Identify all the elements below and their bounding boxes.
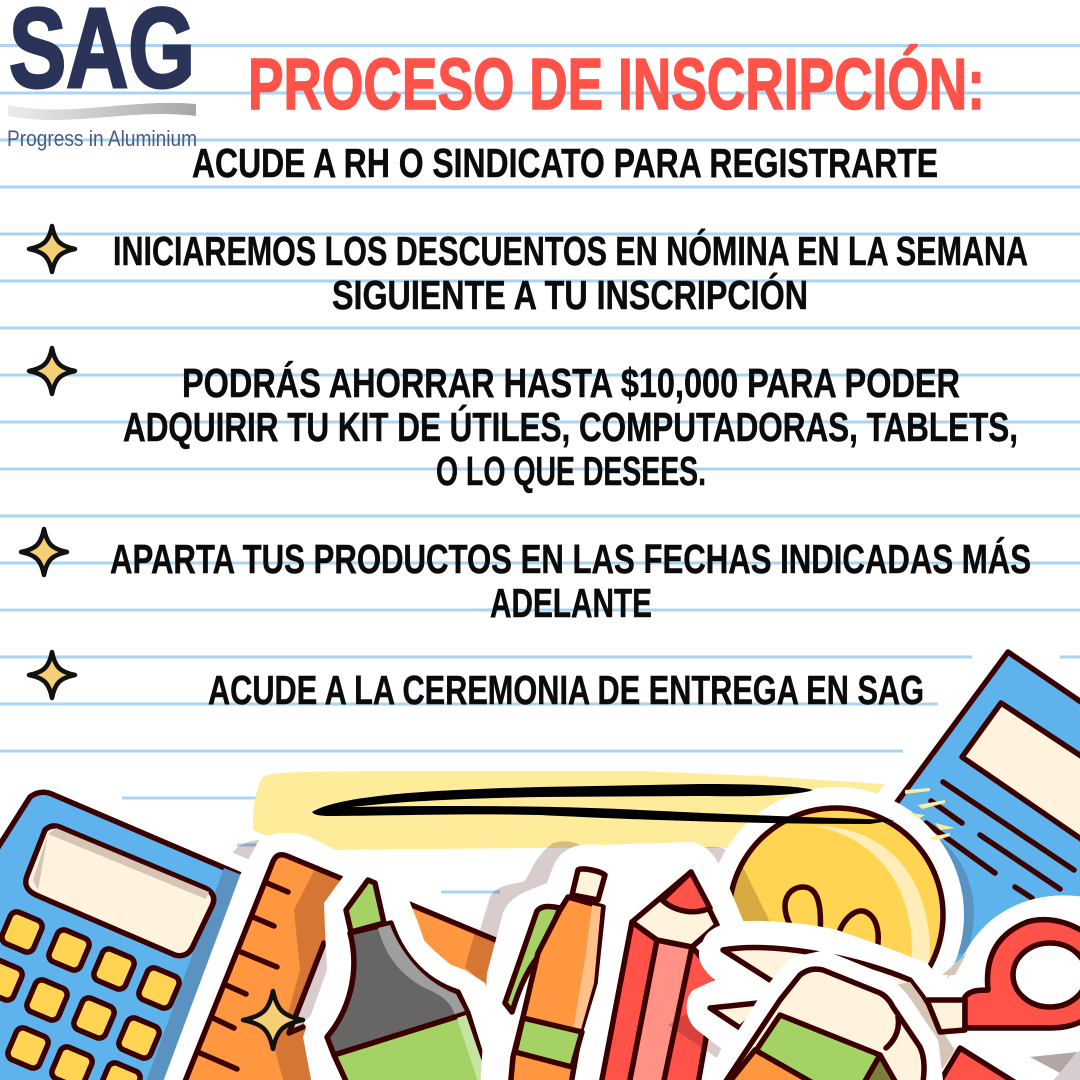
calculator screen <box>26 826 214 956</box>
eraser orange base <box>723 1050 825 1080</box>
upper blade <box>723 948 940 1032</box>
pencil tip <box>662 872 710 912</box>
red handle <box>965 920 1080 1028</box>
illustration: ruler <box>160 833 355 1080</box>
logo: SAG Progress in Aluminium <box>7 0 197 151</box>
illustration: highlighter marker <box>303 860 510 1080</box>
step 4 text <box>110 536 1031 626</box>
step 2 text: SIGUIENTE A TU INSCRIPCIÓN <box>332 272 808 318</box>
pen body <box>510 897 603 1080</box>
calculator keys <box>0 910 181 1080</box>
illustration: set square part behind highlighter <box>390 896 510 990</box>
marker barrel <box>334 1013 492 1080</box>
icon: star on ruler <box>243 991 303 1049</box>
icon: star bullet 4 <box>29 652 75 698</box>
red lower blade <box>935 1048 1027 1080</box>
yellow brush flecks <box>905 788 955 841</box>
illustration: calculator <box>0 775 265 1080</box>
icon: star bullet 3 <box>21 529 67 575</box>
step 3 text <box>123 360 1018 494</box>
sticker shadows <box>227 840 750 960</box>
marker body <box>327 923 468 1055</box>
illustration: yellow coin with lightbulb shapes <box>708 787 964 1043</box>
step 2 text <box>113 228 1028 318</box>
step 3 text: O LO QUE DESEES. <box>436 448 706 494</box>
eraser green band <box>755 1015 897 1080</box>
pencil cone <box>632 872 717 947</box>
yellow highlighter brush stroke <box>253 771 930 850</box>
blade pivot piece <box>927 1000 965 1032</box>
icon: star bullet 2 <box>29 348 75 394</box>
notebook label panel <box>962 703 1080 841</box>
lower blade <box>710 1003 760 1028</box>
illustration: scissors <box>687 895 1080 1080</box>
logo: SAG Progress in Aluminium: Progress in Aluminium <box>7 126 197 151</box>
pen cap <box>572 869 605 900</box>
ruler inner cut-out shadow <box>289 925 345 1033</box>
illustration: pen and pencil sticker <box>480 842 745 1080</box>
pen band <box>515 1018 582 1067</box>
marker tip <box>346 880 384 932</box>
illustration: notebook <box>880 650 1080 1000</box>
eraser corner <box>860 1055 900 1080</box>
icon: star bullet 1 <box>29 226 75 272</box>
illustration: eraser <box>720 969 925 1080</box>
black marker scribble <box>312 784 895 824</box>
pen clip <box>505 906 560 1012</box>
step 4 text: ADELANTE <box>490 580 652 626</box>
pencil body <box>600 922 717 1080</box>
